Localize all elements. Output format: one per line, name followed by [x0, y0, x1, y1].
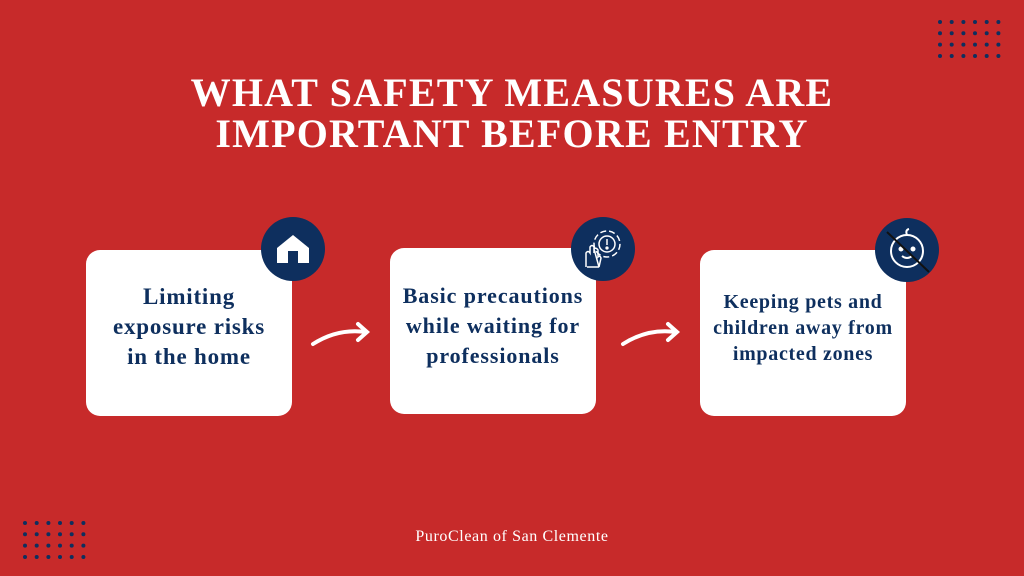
card 3: children away from [713, 317, 893, 339]
card 3: Keeping pets and [723, 291, 882, 313]
icon: hand with gear alert [571, 217, 635, 281]
card 2 [390, 248, 596, 414]
card 2: professionals [426, 343, 560, 368]
card 1: exposure risks [113, 314, 265, 339]
dots top-right [938, 20, 1000, 58]
card 2: while waiting for [406, 313, 580, 338]
card 3 [700, 250, 906, 416]
title: IMPORTANT BEFORE ENTRY [215, 111, 809, 156]
title: WHAT SAFETY MEASURES ARE [191, 70, 833, 115]
arrow 1 [310, 322, 370, 346]
card 3: impacted zones [733, 343, 873, 365]
icon: child face crossed [875, 218, 939, 282]
card 2: Basic precautions [403, 283, 583, 308]
dots bottom-left [23, 521, 86, 559]
footer: PuroClean of San Clemente [415, 528, 609, 545]
card 1: Limiting [143, 284, 235, 309]
title [191, 70, 833, 156]
card 1: in the home [127, 344, 251, 369]
icon: house [261, 217, 325, 281]
card 1 [86, 250, 292, 416]
arrow 2 [620, 322, 680, 346]
